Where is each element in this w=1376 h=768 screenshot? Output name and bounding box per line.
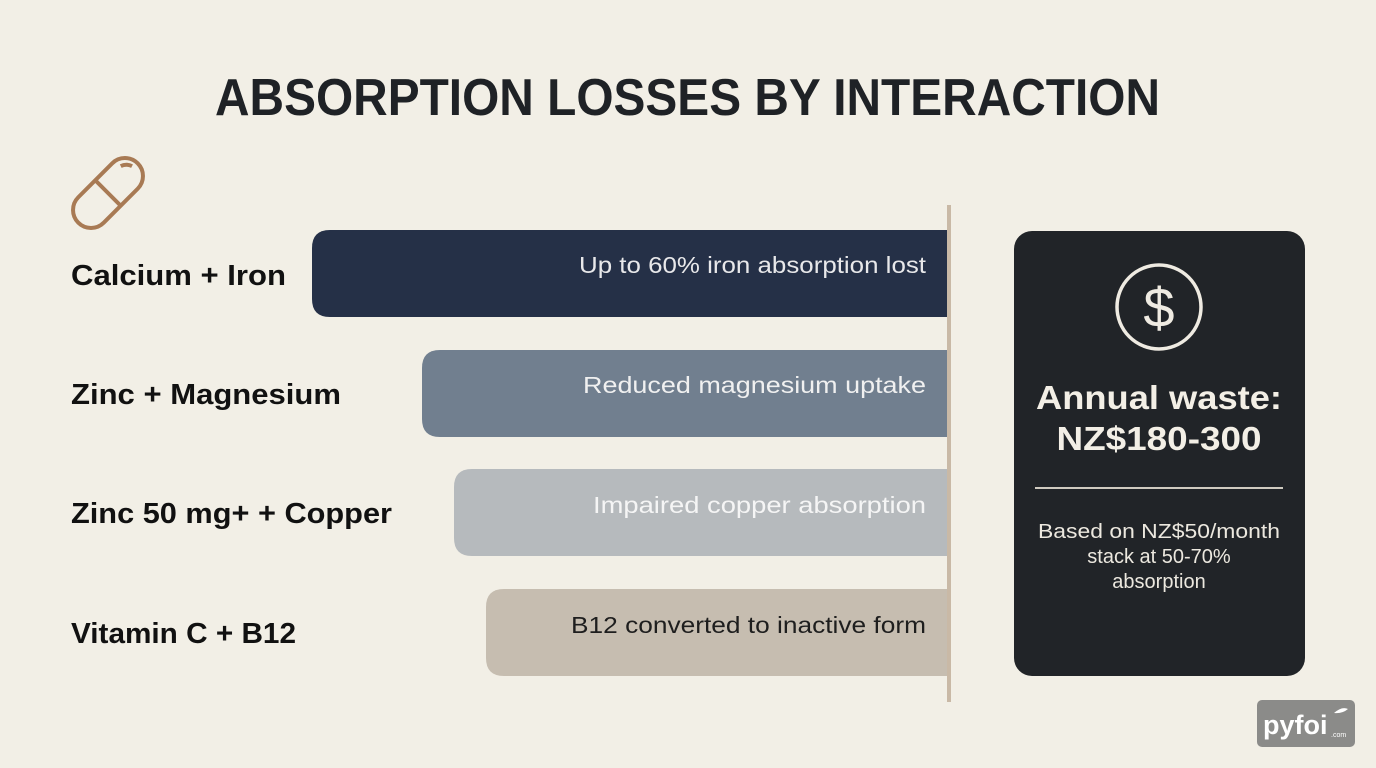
axis line — [947, 205, 951, 702]
row: zinc magnesium: Zinc + Magnesium — [71, 379, 341, 411]
row: zinc copper: Zinc 50 mg+ + Copper — [71, 498, 392, 530]
panel: annual waste card: stack at 50-70% — [1087, 546, 1231, 568]
title: ABSORPTION LOSSES BY INTERACTION — [215, 69, 1160, 127]
panel: annual waste card: Annual waste: — [1036, 379, 1282, 416]
row: zinc copper: Impaired copper absorption — [593, 492, 926, 518]
icon: dollar coin: $ — [1143, 276, 1175, 339]
logo — [1257, 700, 1355, 747]
row: zinc copper — [71, 469, 947, 556]
row: vitamin c b12 — [71, 589, 947, 676]
row: calcium iron: Up to 60% iron absorption lost — [579, 252, 927, 278]
row: zinc magnesium: Reduced magnesium uptake — [583, 372, 926, 398]
row: calcium iron — [71, 230, 947, 317]
row: zinc magnesium — [71, 350, 947, 437]
row: vitamin c b12: B12 converted to inactive form — [571, 612, 926, 638]
panel: annual waste card: NZ$180-300 — [1056, 420, 1262, 457]
panel: annual waste card: Based on NZ$50/month — [1038, 521, 1280, 543]
logo: pyfoi — [1263, 710, 1328, 740]
panel: annual waste card — [1014, 231, 1305, 676]
logo: .com — [1331, 732, 1346, 739]
panel: annual waste card: absorption — [1112, 571, 1206, 593]
icon: capsule — [66, 151, 150, 235]
row: vitamin c b12: Vitamin C + B12 — [71, 618, 296, 650]
icon: dollar coin — [1117, 265, 1201, 349]
row: calcium iron: Calcium + Iron — [71, 260, 286, 292]
